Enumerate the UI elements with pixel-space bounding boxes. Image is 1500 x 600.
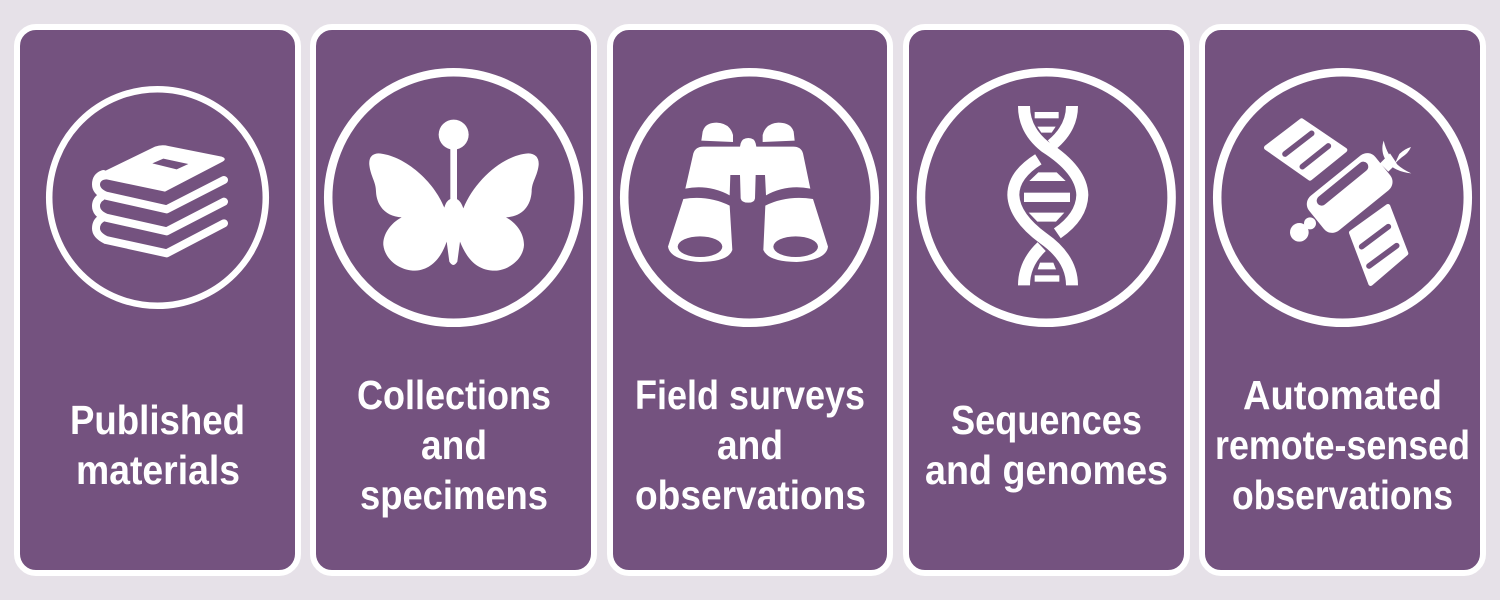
label: automated remote-sensed observations: remote-sensed — [1215, 422, 1470, 468]
icon: circle ring — [328, 72, 579, 323]
card background — [313, 27, 594, 573]
icon: circle ring — [921, 72, 1172, 323]
label: collections and specimens — [357, 372, 551, 518]
label: field surveys and observations — [635, 372, 866, 518]
icon: butterfly — [369, 120, 539, 271]
icon: stack of books — [95, 145, 225, 253]
icon: circle ring — [624, 72, 875, 323]
panel: field surveys and observations — [610, 27, 890, 573]
label: collections and specimens: and — [421, 422, 487, 468]
panel: collections and specimens — [313, 27, 594, 573]
panel: sequences and genomes — [906, 27, 1187, 573]
card background — [17, 27, 298, 573]
label: sequences and genomes — [925, 397, 1168, 493]
label: automated remote-sensed observations — [1215, 372, 1470, 518]
label: collections and specimens: specimens — [360, 472, 548, 518]
label: published materials: materials — [76, 447, 240, 493]
card background — [1202, 27, 1483, 573]
icon: circle ring — [1217, 72, 1468, 323]
icon: satellite — [1266, 121, 1411, 284]
icon: DNA helix — [1013, 106, 1082, 285]
panel: published materials — [17, 27, 298, 573]
label: automated remote-sensed observations: Automated — [1243, 372, 1442, 418]
label: field surveys and observations: Field surveys — [635, 372, 865, 418]
card background — [906, 27, 1187, 573]
label: collections and specimens: Collections — [357, 372, 551, 418]
label: automated remote-sensed observations: observations — [1232, 472, 1453, 518]
card background — [610, 27, 890, 573]
label: field surveys and observations: and — [717, 422, 783, 468]
label: sequences and genomes: and genomes — [925, 447, 1168, 493]
label: published materials — [70, 397, 245, 493]
label: field surveys and observations: observations — [635, 472, 866, 518]
panel: automated remote-sensed observations — [1202, 27, 1483, 573]
icon: circle ring — [49, 89, 266, 306]
label: published materials: Published — [70, 397, 245, 443]
label: sequences and genomes: Sequences — [951, 397, 1142, 443]
icon: binoculars — [668, 123, 828, 262]
